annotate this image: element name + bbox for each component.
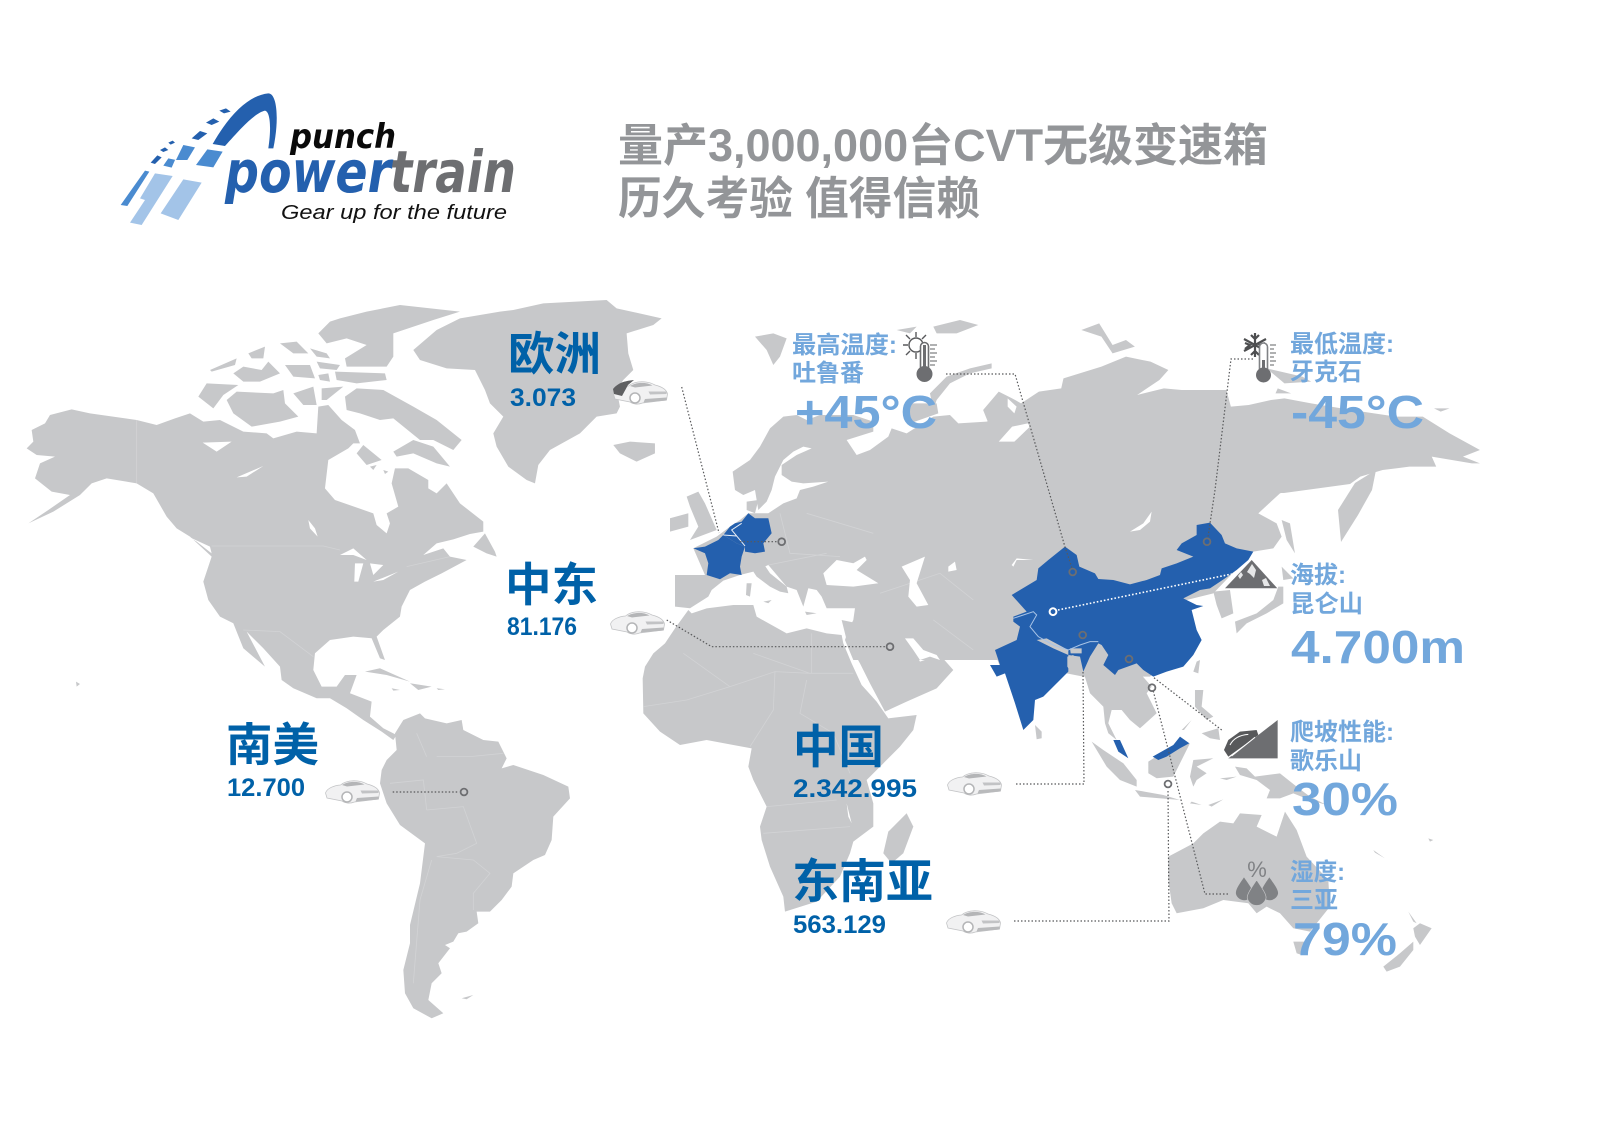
stat: lowest temperature [1290,331,1424,438]
stat: highest temperature: 吐鲁番 [792,360,864,387]
icon: sun and thermometer [903,332,937,382]
connector: South America [393,789,467,795]
label: South America [226,719,319,802]
car icons [326,380,1002,933]
world map [27,300,1480,1018]
stat: climbing: 歌乐山 [1290,748,1362,775]
stat: lowest temperature: 牙克石 [1290,359,1362,386]
icon: humidity drops: % [1247,857,1267,882]
label: Southeast Asia: 东南亚 [792,855,933,908]
panel: sales by region [226,328,933,939]
title line 1: 量产3,000,000台CVT无级变速箱 [618,120,1268,171]
icon: mountain [1225,560,1277,588]
title [618,120,1268,224]
highlighted countries: Malaysia [1113,737,1189,760]
highlighted countries: China and India [990,523,1253,730]
stat: highest temperature [792,332,937,438]
label: China [793,721,917,803]
connector: Middle East [667,620,893,650]
marker: China inner points [1079,632,1132,662]
stat: climbing: 爬坡性能: [1290,719,1394,746]
stat: humidity: 三亚 [1290,887,1338,914]
stat: humidity: 湿度: [1290,859,1345,886]
label: Middle East [505,559,598,641]
panel: test conditions [792,331,1465,965]
connector: Southeast Asia [1014,781,1171,921]
map: Kamchatka [1338,470,1376,542]
icon: humidity drops [1236,857,1278,905]
label: South America: 南美 [226,719,319,771]
map: Arctic Canada, Greenland and Iceland [198,300,662,483]
connector: Europe [682,387,785,545]
map: Africa and Arabia [643,605,953,912]
label: Europe: 欧洲 [508,328,601,380]
label: China: 2.342.995 [793,775,917,803]
stat: altitude: 4.700m [1291,621,1465,673]
logo: Punch Powertrain [121,93,516,225]
label: Middle East: 中东 [505,559,598,611]
logo word: train: train [390,138,516,206]
title line 2: 历久考验 值得信赖 [618,173,980,224]
map: western Eurasia [670,320,1000,660]
connector: China [1016,672,1084,784]
icon: car Europe [613,380,668,404]
map: Siberia [950,323,1480,493]
logo tagline: Gear up for the future [281,202,507,224]
map: Oceania [1168,767,1433,972]
sea overlays: Black Sea and Caspian [823,557,957,607]
icon: car China [948,773,1002,795]
stat: highest temperature: +45°C [795,386,937,438]
logo word: power: power [224,138,394,206]
stat: altitude: 昆仑山 [1290,591,1363,618]
stat: climbing: 30% [1292,773,1398,825]
stat: lowest temperature: -45°C [1291,386,1424,438]
connector: climbing [1153,677,1222,730]
logo word: punch: punch [289,117,396,157]
stat: climbing [1290,719,1398,825]
connector: humidity [1149,684,1228,894]
label: Europe [508,328,601,412]
map: North America mainland [27,405,497,740]
map: East and Southeast Asia [980,480,1300,800]
label: Middle East: 81.176 [507,613,577,641]
stat: highest temperature: 最高温度: [792,332,897,359]
icon: logo swoosh and squares [121,93,277,225]
connector: altitude [1050,574,1232,615]
connector lines and location markers [393,359,1253,921]
connector: lowest temperature [1204,359,1253,545]
map: South America [380,713,570,1018]
label: Southeast Asia [792,855,933,939]
connector: highest temperature [946,374,1076,575]
label: South America: 12.700 [227,774,305,802]
icon: car Southeast Asia [946,911,1000,933]
stat: humidity [1290,859,1397,965]
icon: car on slope [1224,720,1278,758]
icon: car Middle East [610,612,664,634]
label: Europe: 3.073 [510,384,576,412]
label: Southeast Asia: 563.129 [793,911,886,939]
stat: lowest temperature: 最低温度: [1290,331,1394,358]
label: China: 中国 [793,721,884,773]
icon: snowflake and thermometer [1244,333,1276,382]
stat: altitude: 海拔: [1290,562,1346,589]
stat: altitude [1290,562,1465,673]
stat: humidity: 79% [1293,913,1397,965]
highlighted countries: France, Benelux, Germany [693,513,772,579]
icon: car South America [326,781,380,803]
